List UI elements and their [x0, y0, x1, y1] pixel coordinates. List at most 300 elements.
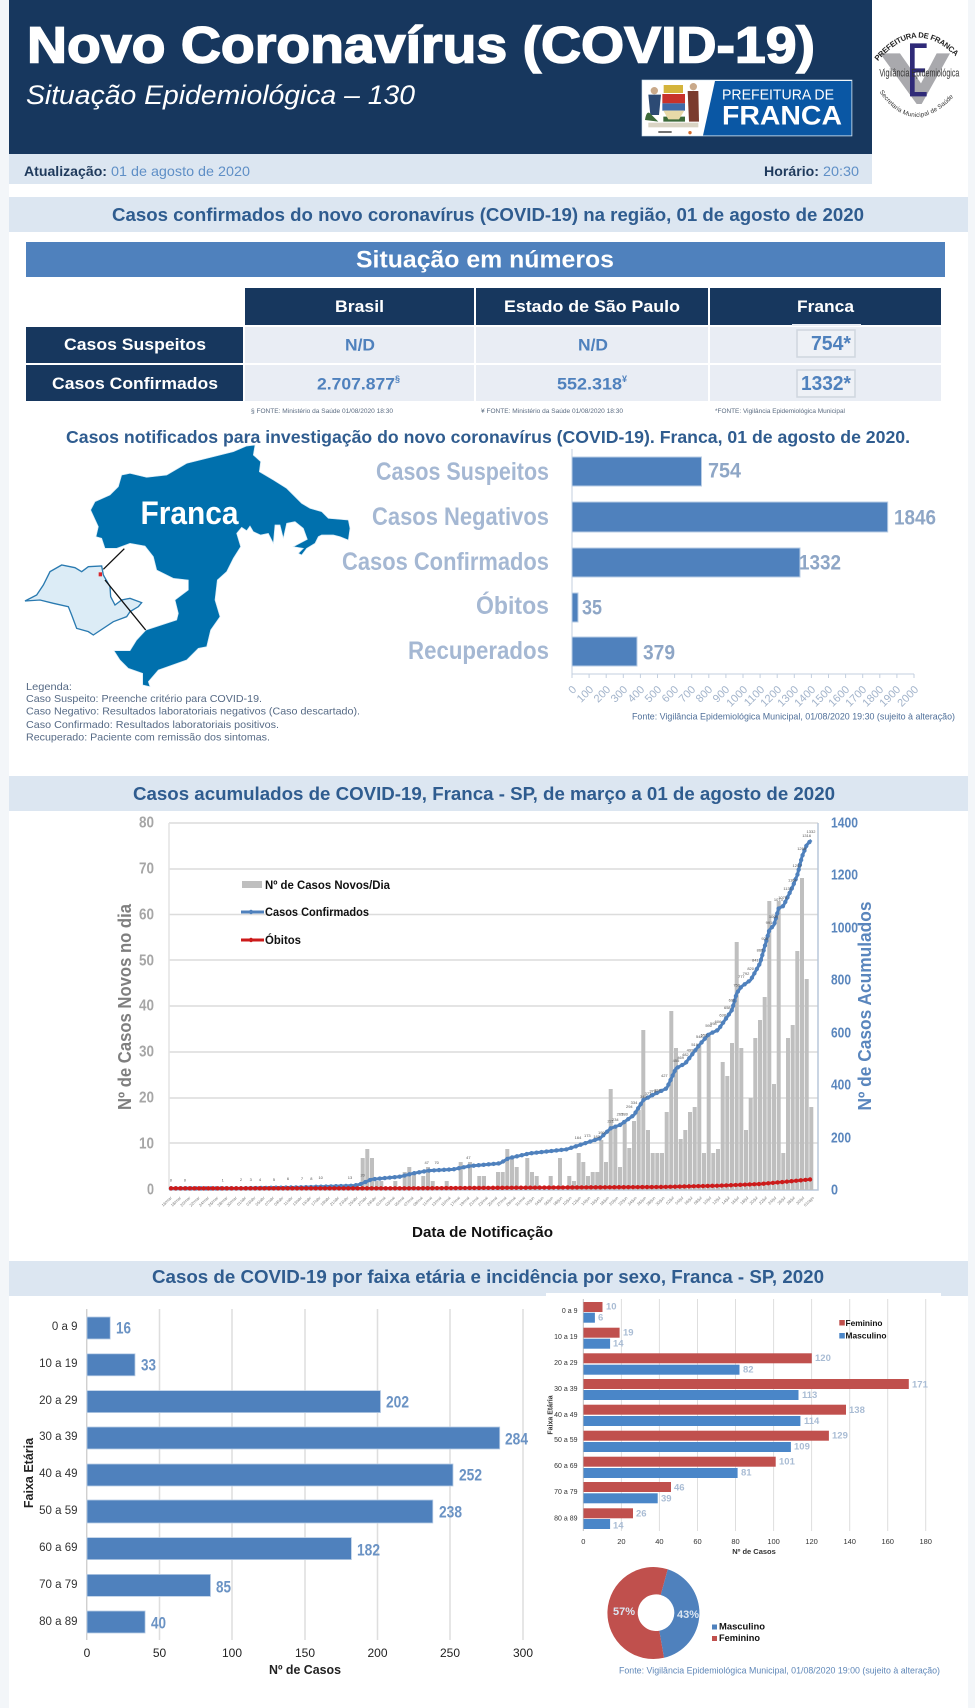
- x axis dates: 11/abr: [282, 1195, 294, 1207]
- right axis: 1400: [831, 814, 858, 832]
- bar chart: casos notificados: 2000: [895, 684, 921, 710]
- left axis: 10: [139, 1136, 154, 1152]
- x axis dates: 30/mar: [226, 1195, 238, 1208]
- bar chart: incidência por sexo: 138: [849, 1405, 865, 1416]
- bar chart: faixa etária: 60 a 69: [39, 1542, 78, 1554]
- x axis dates: 28/mar: [216, 1195, 229, 1208]
- left axis: [139, 814, 154, 1198]
- x axis dates: 25/abr: [347, 1195, 359, 1207]
- legend text: Caso Confirmado: Resultados laboratoriais positivos.: [26, 719, 279, 731]
- bar chart: incidência por sexo: 60: [693, 1537, 702, 1546]
- donut chart: sexo: 57%: [613, 1606, 635, 1618]
- bar chart: incidência por sexo: 82: [743, 1364, 754, 1376]
- left axis: 50: [139, 952, 154, 970]
- bar chart: casos notificados: 500: [643, 684, 664, 705]
- title: Novo Coronavírus (COVID-19): [27, 16, 815, 74]
- bar chart: faixa etária: 50: [153, 1646, 166, 1660]
- x axis dates: 30/jun: [654, 1195, 666, 1206]
- x axis dates: 16/jun: [589, 1195, 601, 1206]
- legend: donut: Feminino: [719, 1633, 760, 1644]
- data labels: 5: [273, 1177, 276, 1182]
- bar chart: faixa etária: 40: [151, 1614, 166, 1632]
- x axis dates: 09/mai: [412, 1195, 424, 1207]
- bar chart: casos notificados: 1300: [775, 684, 801, 710]
- bar chart: casos notificados: 1846: [894, 506, 936, 530]
- update bar: 01 de agosto de 2020: [111, 163, 250, 179]
- x axis dates: 24/mar: [198, 1195, 210, 1208]
- table: situação em números: Casos Suspeitos: [64, 336, 206, 354]
- table footnotes: *FONTE: Vigilância Epidemiológica Municipal: [715, 409, 845, 415]
- data labels: 1316: [802, 833, 812, 838]
- update bar: [9, 154, 872, 184]
- x axis dates: 17/mai: [449, 1195, 461, 1207]
- x axis dates: 12/jun: [571, 1195, 582, 1206]
- header banner: [9, 0, 872, 154]
- x axis dates: 11/mai: [421, 1195, 433, 1207]
- x axis dates: 17/abr: [310, 1195, 322, 1207]
- x axis dates: 02/jun: [524, 1195, 535, 1206]
- data labels: 199: [598, 1130, 605, 1135]
- x axis dates: 29/abr: [366, 1195, 378, 1207]
- bar chart: casos notificados: 1100: [742, 684, 767, 709]
- x axis dates: 06/jul: [683, 1195, 694, 1206]
- data labels: 265: [617, 1111, 624, 1116]
- right axis: 800: [831, 972, 851, 988]
- x axis dates: 01/abr: [236, 1195, 248, 1207]
- left axis: 0: [147, 1182, 154, 1198]
- bar chart: faixa etária: 10 a 19: [39, 1358, 78, 1370]
- bar chart: incidência por sexo: 0 a 9: [562, 1308, 578, 1315]
- bar chart: incidência por sexo: 30 a 39: [554, 1386, 578, 1393]
- x axis dates: 22/jul: [758, 1195, 768, 1206]
- bar chart: incidência por sexo: 101: [779, 1456, 796, 1468]
- data labels: 638: [719, 1012, 727, 1017]
- bar chart: incidência por sexo: 10 a 19: [554, 1334, 578, 1341]
- bar chart: incidência por sexo: Nº de Casos: [732, 1547, 776, 1556]
- bar chart: faixa etária: 182: [357, 1540, 380, 1560]
- data labels: 1164: [788, 877, 797, 882]
- bar chart: casos notificados: 700: [677, 684, 698, 705]
- label: Franca: Franca: [140, 495, 239, 531]
- bar chart: faixa etária: 150: [295, 1646, 315, 1660]
- bar chart: casos notificados: Casos Confirmados: [342, 548, 549, 576]
- logo: Vigilância Epidemiológica: PREFEITURA DE FRANCA: [874, 32, 958, 61]
- bar chart: incidência por sexo: 40: [655, 1537, 664, 1546]
- bar chart: incidência por sexo: 40 a 49: [554, 1412, 578, 1419]
- bar chart: faixa etária: 40 a 49: [39, 1468, 78, 1480]
- bar chart: incidência por sexo: 129: [832, 1430, 848, 1442]
- logo: Vigilância Epidemiológica: [874, 32, 960, 118]
- x axis dates: 05/mai: [393, 1195, 405, 1207]
- data labels: 1: [222, 1177, 225, 1182]
- bar chart: casos notificados: 400: [626, 684, 647, 705]
- data labels: 70: [434, 1160, 440, 1165]
- right axis: 0: [831, 1182, 838, 1198]
- bar chart: incidência por sexo: 109: [794, 1442, 810, 1452]
- data labels: 469: [677, 1055, 685, 1060]
- bar chart: incidência por sexo: 50 a 59: [554, 1437, 578, 1444]
- bar chart: faixa etária: 200: [367, 1646, 388, 1660]
- data labels: 792: [743, 971, 750, 976]
- x axis dates: 18/jul: [739, 1195, 749, 1206]
- legend: donut: Masculino: [719, 1622, 765, 1632]
- data labels: 548: [696, 1034, 703, 1039]
- bar chart: casos notificados: Recuperados: [408, 637, 549, 665]
- x axis dates: 16/mar: [160, 1195, 173, 1208]
- panel: Situação em números: Situação em números: [356, 246, 614, 274]
- bar chart: casos notificados: 1200: [758, 684, 784, 710]
- x axis dates: 25/mai: [486, 1195, 498, 1207]
- data labels: 3: [250, 1177, 253, 1182]
- table: situação em números: [26, 288, 941, 401]
- x axis dates: 09/abr: [273, 1195, 285, 1207]
- data labels: 658: [724, 1005, 731, 1010]
- data labels: 519: [691, 1042, 699, 1047]
- x axis dates: 26/jun: [636, 1195, 647, 1206]
- bar chart: casos notificados: Óbitos: [476, 590, 549, 620]
- data labels: 0: [170, 1177, 173, 1182]
- data labels: 820: [747, 966, 755, 971]
- bar chart: incidência por sexo: 81: [741, 1468, 752, 1478]
- bar chart: incidência por sexo: 160: [881, 1537, 894, 1546]
- logo: Vigilância Epidemiológica: Secretaria Municipal de Saúde: [880, 90, 953, 118]
- section heading: faixa etária: [9, 1261, 968, 1296]
- table: situação em números: N/D: [345, 336, 375, 354]
- table: situação em números: 552.318: [557, 374, 622, 394]
- bar chart: incidência por sexo: 120: [815, 1353, 831, 1364]
- data labels: 455: [673, 1058, 680, 1063]
- bar chart: incidência por sexo: 70 a 79: [554, 1489, 578, 1496]
- bar chart: casos notificados: 1600: [826, 684, 852, 710]
- bar chart: faixa etária: 300: [513, 1646, 533, 1660]
- x axis dates: 20/jun: [608, 1195, 619, 1206]
- data labels: 750: [733, 982, 741, 987]
- bar chart: faixa etária: 70 a 79: [39, 1579, 78, 1591]
- chart legend: Óbitos: [265, 932, 301, 947]
- x axis dates: 03/abr: [245, 1195, 257, 1207]
- bar chart: casos notificados: 300: [609, 684, 630, 705]
- data labels: 1332: [807, 829, 816, 834]
- data labels: 598: [710, 1021, 717, 1026]
- bar chart: casos notificados: 100: [575, 684, 596, 705]
- bar chart: incidência por sexo: 140: [843, 1537, 856, 1546]
- data labels: 865: [757, 947, 764, 952]
- data labels: 384: [654, 1087, 661, 1092]
- bar chart: incidência por sexo: 10: [606, 1302, 617, 1312]
- logo: Prefeitura de Franca: PREFEITURA DE: [722, 86, 834, 104]
- x axis dates: 18/jun: [599, 1195, 610, 1206]
- x axis dates: 31/mai: [514, 1195, 526, 1207]
- data labels: 294: [626, 1104, 633, 1109]
- bar chart: faixa etária: 238: [439, 1502, 462, 1522]
- data labels: 6: [287, 1176, 290, 1181]
- table: situação em números: Franca: [797, 298, 855, 316]
- legend text: [26, 681, 360, 744]
- source note: faixa etária: Fonte: Vigilância Epidemiológica Municipal, 01/08/2020 19:00 (sujeito à alteração): [619, 1666, 940, 1676]
- x axis dates: 24/jun: [627, 1195, 638, 1206]
- table: situação em números: 2.707.877: [317, 374, 395, 394]
- bar chart: incidência por sexo: 80: [731, 1537, 740, 1546]
- axis title left: Nº de Casos Novos no dia: [115, 903, 135, 1110]
- bar chart: incidência por sexo: [548, 1299, 932, 1556]
- x axis dates: 10/jul: [702, 1195, 712, 1206]
- combo chart: casos acumulados: [115, 814, 875, 1241]
- x axis dates: 04/jun: [534, 1195, 545, 1206]
- table: situação em números: Estado de São Paulo: [504, 298, 680, 316]
- lines: casos confirmados and óbitos: [170, 829, 816, 1188]
- left axis: 60: [139, 906, 154, 924]
- data labels: 7: [301, 1176, 304, 1181]
- data labels: 2: [240, 1177, 243, 1182]
- legend text: Caso Suspeito: Preenche critério para COVID-19.: [26, 693, 262, 705]
- bar chart: faixa etária: Nº de Casos: [269, 1663, 341, 1677]
- bar chart: casos notificados: 379: [643, 642, 675, 664]
- bar chart: faixa etária: 85: [216, 1578, 231, 1596]
- x axis dates: 21/mai: [468, 1195, 480, 1207]
- axis title right: Nº de Casos Acumulados: [855, 902, 875, 1110]
- data labels: 47: [424, 1160, 430, 1165]
- bar chart: incidência por sexo: 19: [623, 1328, 634, 1338]
- logo: Prefeitura de Franca: [642, 80, 852, 136]
- x axis dates: 22/jun: [617, 1195, 628, 1206]
- x axis dates: 16/jul: [730, 1195, 740, 1206]
- table footnotes: [251, 409, 845, 415]
- x axis dates: 28/jun: [645, 1195, 656, 1206]
- bar chart: casos notificados: 900: [711, 684, 732, 705]
- left axis: 40: [139, 998, 154, 1014]
- bar chart: casos notificados: Casos Negativos: [372, 503, 549, 531]
- bar chart: incidência por sexo: 46: [674, 1482, 685, 1494]
- x axis dates: 27/mai: [496, 1195, 508, 1207]
- x axis dates: 10/jun: [561, 1195, 573, 1206]
- data labels: 164: [575, 1135, 582, 1140]
- bar chart: casos notificados: 1400: [792, 684, 818, 710]
- left axis: 30: [139, 1044, 154, 1060]
- x axis dates: 01/ago: [803, 1195, 815, 1207]
- x axis dates: 08/jun: [552, 1195, 563, 1206]
- section heading: faixa etária: Casos de COVID-19 por faixa etária e incidência por sexo, Franca - SP, 2020: [152, 1267, 824, 1287]
- bar chart: incidência por sexo: 100: [767, 1537, 780, 1546]
- bar chart: incidência por sexo: 20: [617, 1537, 626, 1546]
- bar chart: casos notificados: 1332: [799, 552, 841, 574]
- right axis: 1200: [831, 866, 858, 884]
- data labels: 280: [621, 1111, 629, 1116]
- x axis dates: [160, 1195, 815, 1208]
- legend text: Legenda:: [26, 681, 72, 693]
- data labels: 590: [705, 1023, 713, 1028]
- data labels: 1073: [774, 897, 784, 902]
- data labels: 47: [466, 1155, 471, 1160]
- right axis: 200: [831, 1130, 851, 1146]
- data labels: 8: [310, 1176, 313, 1181]
- legend text: Recuperado: Paciente com remissão dos sintomas.: [26, 732, 270, 744]
- bar chart: incidência por sexo: 171: [912, 1380, 929, 1390]
- x axis title: Data de Notificação: [412, 1225, 553, 1241]
- update bar: Atualização:: [24, 163, 107, 179]
- logo: Prefeitura de Franca: FRANCA: [722, 100, 842, 130]
- x axis dates: 06/jun: [543, 1195, 554, 1206]
- data labels: 173: [584, 1133, 591, 1138]
- x axis dates: 07/mai: [403, 1195, 415, 1207]
- bar chart: faixa etária: 50 a 59: [39, 1505, 78, 1517]
- chart legend: Casos Confirmados: [265, 905, 369, 919]
- data labels: 1203: [793, 863, 802, 868]
- x axis dates: 20/mar: [179, 1195, 192, 1208]
- data labels: 1268: [797, 846, 807, 851]
- data labels: 343: [640, 1094, 647, 1099]
- x axis dates: 15/mai: [440, 1195, 452, 1207]
- left axis: 20: [139, 1090, 154, 1106]
- x axis dates: 28/jul: [786, 1195, 796, 1206]
- data labels: 20: [360, 1172, 366, 1177]
- right axis: 400: [831, 1076, 851, 1094]
- left axis: 80: [139, 814, 154, 832]
- legend: sexo: Masculino: [846, 1331, 886, 1341]
- bar chart: faixa etária: 80 a 89: [39, 1616, 78, 1628]
- bar chart: incidência por sexo: 6: [598, 1312, 603, 1324]
- bar chart: faixa etária: Faixa Etária: [22, 1437, 36, 1508]
- chart legend: Nº de Casos Novos/Dia: [265, 878, 390, 892]
- legend: donut: [712, 1622, 765, 1644]
- x axis dates: 27/abr: [357, 1195, 369, 1207]
- x axis dates: 21/abr: [329, 1195, 341, 1207]
- x axis dates: 07/abr: [264, 1195, 276, 1207]
- bar chart: casos notificados: 1000: [724, 684, 750, 710]
- x axis dates: 12/jul: [711, 1195, 722, 1206]
- map: estado de São Paulo: [25, 549, 146, 635]
- right axis: [831, 814, 858, 1198]
- bar chart: casos notificados: 600: [660, 684, 681, 705]
- bar chart: incidência por sexo: 120: [805, 1537, 818, 1546]
- table: situação em números: N/D: [578, 336, 608, 354]
- bar chart: incidência por sexo: 14: [613, 1338, 624, 1350]
- data labels: 482: [682, 1052, 689, 1057]
- x axis dates: 24/jul: [767, 1195, 777, 1206]
- subtitle: Situação Epidemiológica – 130: [26, 80, 415, 110]
- data labels: 371: [645, 1091, 652, 1096]
- table footnotes: ¥ FONTE: Ministério da Saúde 01/08/2020 18:30: [481, 409, 624, 415]
- bar chart: casos notificados: 1800: [860, 684, 886, 710]
- data labels: 556: [701, 1032, 708, 1037]
- heading: casos notificados: Casos notificados para investigação do novo coronavírus (COVID-19). Franca, 01 de agosto de 2020.: [66, 427, 910, 447]
- update bar: Horário:: [764, 163, 819, 179]
- x axis dates: 14/jun: [580, 1195, 591, 1206]
- right axis: 600: [831, 1024, 851, 1042]
- x axis dates: 19/mai: [458, 1195, 470, 1207]
- bar chart: incidência por sexo: 60 a 69: [554, 1463, 578, 1470]
- x axis dates: 22/mar: [188, 1195, 201, 1208]
- bar chart: faixa etária: 100: [222, 1646, 242, 1660]
- x axis dates: 30/jul: [795, 1195, 805, 1206]
- bar chart: incidência por sexo: 113: [802, 1390, 817, 1401]
- bar chart: faixa etária: 0 a 9: [52, 1321, 78, 1333]
- bar chart: incidência por sexo: 80 a 89: [554, 1516, 578, 1522]
- data labels: [170, 829, 816, 1182]
- data labels: 841: [752, 957, 759, 962]
- left axis: 70: [139, 860, 154, 878]
- bar chart: faixa etária: 33: [141, 1356, 156, 1374]
- bar chart: casos notificados: 200: [592, 684, 613, 705]
- bar chart: incidência por sexo: 0: [581, 1537, 585, 1546]
- section heading: região: Casos confirmados do novo coronavírus (COVID-19) na região, 01 de agosto de 2020: [112, 205, 864, 225]
- data labels: 221: [607, 1118, 615, 1123]
- data labels: 991: [766, 920, 773, 925]
- data labels: 499: [687, 1047, 694, 1052]
- data labels: 4: [259, 1177, 262, 1182]
- bar chart: incidência por sexo: 114: [804, 1416, 820, 1427]
- table: situação em números: Brasil: [335, 298, 384, 316]
- x axis dates: 08/jul: [693, 1195, 703, 1206]
- x axis dates: 15/abr: [301, 1195, 313, 1207]
- bar chart: faixa etária: 284: [505, 1430, 528, 1448]
- data labels: 427: [661, 1073, 668, 1078]
- table footnotes: § FONTE: Ministério da Saúde 01/08/2020 18:30: [251, 409, 394, 415]
- legend: sexo: [839, 1318, 886, 1341]
- x axis dates: 13/abr: [291, 1195, 303, 1207]
- x axis dates: 13/mai: [430, 1195, 443, 1207]
- x axis dates: 29/mai: [505, 1195, 517, 1207]
- bar chart: casos notificados: [342, 449, 936, 710]
- data labels: 334: [631, 1100, 638, 1105]
- data labels: 928: [761, 936, 769, 941]
- section heading: região: [9, 197, 968, 232]
- x axis dates: 26/jul: [776, 1195, 787, 1206]
- x axis dates: 20/jul: [748, 1195, 759, 1206]
- bar chart: faixa etária: 250: [440, 1646, 460, 1660]
- bar chart: incidência por sexo: Faixa Etária: [548, 1395, 554, 1435]
- table: situação em números: Casos Confirmados: [52, 375, 218, 393]
- map: município de Franca: [25, 445, 350, 687]
- bar chart: faixa etária: [22, 1309, 533, 1677]
- bar chart: faixa etária: 30 a 39: [39, 1431, 78, 1443]
- data labels: 378: [649, 1088, 657, 1093]
- chart legend: [241, 878, 390, 947]
- bar chart: casos notificados: 1900: [877, 684, 903, 710]
- bar chart: incidência por sexo: 26: [636, 1508, 647, 1520]
- x axis dates: 23/abr: [338, 1195, 350, 1207]
- x axis dates: 04/jul: [674, 1195, 684, 1206]
- x axis dates: 26/mar: [207, 1195, 220, 1208]
- update bar: 20:30: [823, 163, 859, 179]
- x axis dates: 18/mar: [170, 1195, 183, 1208]
- data labels: 13: [348, 1175, 353, 1180]
- table: situação em números: ¥: [622, 374, 627, 384]
- panel: Situação em números: [26, 242, 945, 277]
- x axis dates: 02/jul: [665, 1195, 675, 1206]
- data labels: 1008: [769, 914, 779, 919]
- bar chart: incidência por sexo: 39: [661, 1494, 672, 1504]
- bar chart: casos notificados: 754: [708, 460, 741, 482]
- bar chart: incidência por sexo: 180: [919, 1537, 932, 1546]
- table: situação em números: 1332*: [801, 373, 851, 395]
- donut chart: sexo: [607, 1567, 765, 1659]
- data labels: 0: [184, 1177, 187, 1182]
- data labels: 234: [612, 1117, 619, 1122]
- bar chart: faixa etária: 252: [459, 1466, 482, 1484]
- x axis dates: 05/abr: [254, 1195, 266, 1207]
- bar chart: casos notificados: 1700: [843, 684, 869, 710]
- x axis dates: 01/mai: [375, 1195, 387, 1207]
- x axis dates: 19/abr: [319, 1195, 331, 1207]
- x axis dates: 03/mai: [384, 1195, 396, 1207]
- bar chart: casos notificados: 0: [566, 684, 579, 697]
- right axis: 1000: [831, 920, 858, 936]
- bar chart: casos notificados: 1500: [809, 684, 835, 710]
- section heading: casos acumulados: Casos acumulados de COVID-19, Franca - SP, de março a 01 de agosto de 2020: [133, 784, 835, 804]
- donut chart: sexo: 43%: [677, 1609, 699, 1621]
- bar chart: faixa etária: 0: [84, 1646, 91, 1660]
- data labels: 606: [715, 1019, 722, 1024]
